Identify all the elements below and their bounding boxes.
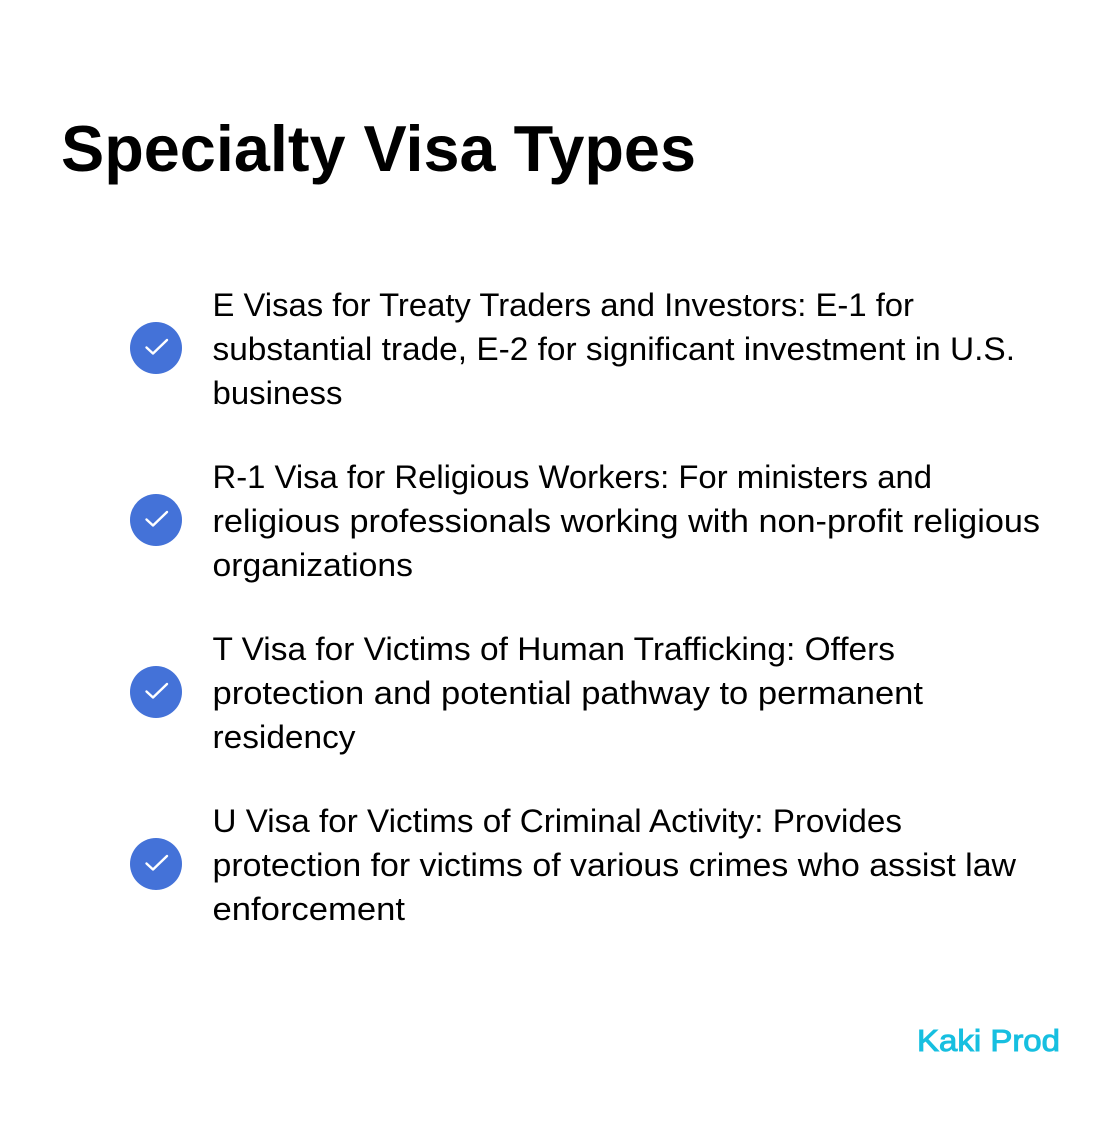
text: E visas description bbox=[212, 287, 1015, 411]
text: R-1 visa description bbox=[212, 459, 1040, 583]
icon: check badge bbox=[130, 322, 182, 374]
text: R-1 visa description: R-1 Visa for Religious Workers: For ministers and bbox=[212, 459, 932, 495]
text: E visas description: E Visas for Treaty Traders and Investors: E-1 for bbox=[212, 287, 914, 323]
text: U visa description: protection for victims of various crimes who assist law bbox=[212, 847, 1017, 883]
text: T visa description: T Visa for Victims of Human Trafficking: Offers bbox=[212, 631, 895, 667]
text: U visa description: enforcement bbox=[212, 891, 405, 927]
icon: check badge bbox=[130, 494, 182, 546]
text: U visa description bbox=[212, 803, 1017, 927]
icon: check badge bbox=[130, 666, 182, 718]
text: E visas description: substantial trade, E-2 for significant investment in U.S. bbox=[212, 331, 1015, 367]
text: T visa description: residency bbox=[212, 719, 356, 755]
title: Specialty Visa Types bbox=[61, 112, 696, 185]
list item: E visas bbox=[130, 287, 1015, 411]
list item: R-1 visa bbox=[130, 459, 1040, 583]
text: U visa description: U Visa for Victims of Criminal Activity: Provides bbox=[212, 803, 902, 839]
text: R-1 visa description: religious professionals working with non-profit religious bbox=[212, 503, 1040, 539]
logo: Kaki Prod: Kaki Prod bbox=[917, 1023, 1060, 1058]
icon: check badge bbox=[130, 838, 182, 890]
list item: U visa bbox=[130, 803, 1017, 927]
text: E visas description: business bbox=[212, 375, 342, 411]
text: T visa description: protection and potential pathway to permanent bbox=[212, 675, 923, 711]
list item: T visa bbox=[130, 631, 923, 755]
text: R-1 visa description: organizations bbox=[212, 547, 413, 583]
text: T visa description bbox=[212, 631, 923, 755]
